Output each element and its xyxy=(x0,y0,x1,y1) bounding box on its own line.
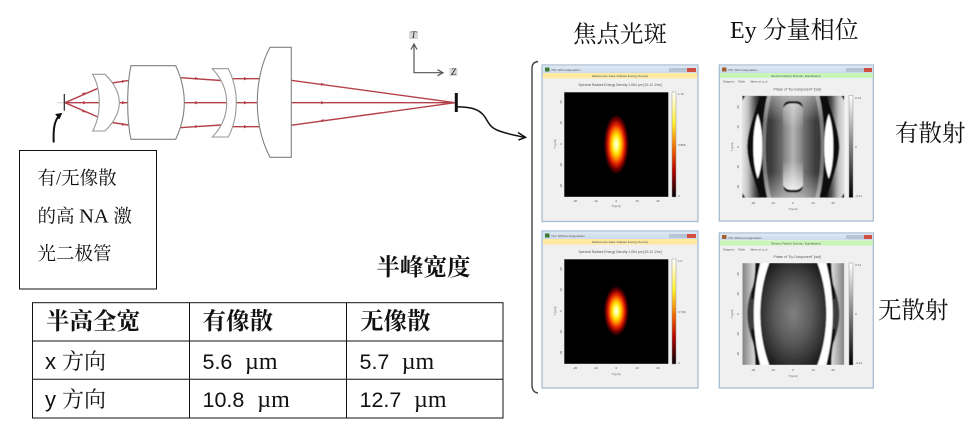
panel: Ey phase with astigmatism xyxy=(719,65,873,221)
panel: Ey phase with astigmatism: 3.14 xyxy=(855,96,861,100)
panel: focal spot with astigmatism: 706: With Astigmatism xyxy=(551,68,581,72)
row label: with scatter: 有散射 xyxy=(895,120,966,147)
optical system diagram xyxy=(54,30,526,157)
table: FWHM values: 方向 xyxy=(62,349,106,374)
panel: focal spot with astigmatism: 20 xyxy=(559,100,563,104)
panel: focal spot with astigmatism: -10 xyxy=(559,163,563,167)
axis label Z xyxy=(450,67,458,77)
panel: focal spot without astigmatism: Y [µm] xyxy=(553,307,557,315)
panel: focal spot without astigmatism: 0 xyxy=(559,310,563,312)
panel: Ey phase with astigmatism: Value at (x,y) xyxy=(750,80,767,84)
table: FWHM values: 无像散 xyxy=(360,308,431,335)
panel: focal spot with astigmatism: 1.72 xyxy=(678,92,684,96)
panel: focal spot with astigmatism: 0 xyxy=(678,194,680,198)
panel: Ey phase without astigmatism: 20 xyxy=(831,368,835,372)
panel: Ey phase with astigmatism: 20 xyxy=(831,201,835,205)
panel: focal spot without astigmatism: -20 xyxy=(573,366,577,370)
panel: Ey phase with astigmatism: 706: With Astigmatism xyxy=(728,68,758,72)
panel: focal spot with astigmatism: Y [µm] xyxy=(553,140,557,148)
panel: focal spot with astigmatism: Radiometric Data: Radiant Energy Density xyxy=(592,74,649,78)
panel: focal spot without astigmatism: 20 xyxy=(656,366,660,370)
panel: Ey phase with astigmatism: -3.14 xyxy=(855,194,862,198)
table: FWHM values xyxy=(32,303,503,418)
panel: Ey phase with astigmatism: Phase of "Ey-Component" [rad] xyxy=(773,88,821,92)
panel: Ey phase with astigmatism: Y [µm] xyxy=(730,143,734,151)
panel: Ey phase with astigmatism: X [µm] xyxy=(789,207,798,211)
callout: laser diode: 的高 NA 激 xyxy=(38,206,132,228)
table: FWHM values: µm xyxy=(257,387,290,413)
panel: Ey phase with astigmatism: Electric Field (k Domain, Equidistant) xyxy=(771,74,821,78)
phase map xyxy=(742,96,844,198)
detector xyxy=(455,93,458,112)
table: FWHM values: µm xyxy=(245,349,278,375)
panel: Ey phase with astigmatism: 20 xyxy=(736,105,740,109)
panel: focal spot without astigmatism: 0 xyxy=(615,366,617,370)
panel: Ey phase with astigmatism: 10 xyxy=(736,125,740,129)
panel: Ey phase with astigmatism: 0 xyxy=(792,201,794,205)
panel: focal spot with astigmatism: -10 xyxy=(594,199,598,203)
callout: laser diode: 光二极管 xyxy=(38,243,112,265)
panel: focal spot with astigmatism: 0 xyxy=(615,199,617,203)
laser source xyxy=(63,94,65,111)
panel: Ey phase without astigmatism: 10 xyxy=(736,292,740,296)
panel: Ey phase without astigmatism: Phase of "Ey-Component" [rad] xyxy=(773,255,821,259)
lens 3 xyxy=(212,69,236,137)
panel: Ey phase without astigmatism: -10 xyxy=(771,368,775,372)
panel: Ey phase without astigmatism: 3.14 xyxy=(855,263,861,267)
source pointer arrow xyxy=(54,114,62,142)
panel: focal spot without astigmatism: 0.799 xyxy=(678,310,686,314)
panel: focal spot without astigmatism xyxy=(542,231,698,388)
panel: Ey phase without astigmatism: Y [µm] xyxy=(730,310,734,318)
detector arrow xyxy=(457,107,526,140)
panel: focal spot without astigmatism: 712: Without Astigmatism xyxy=(551,234,585,238)
table: FWHM values: 5.7 xyxy=(360,350,389,374)
panel: focal spot with astigmatism: -20 xyxy=(559,184,563,188)
table: FWHM values: y xyxy=(45,387,56,412)
panel: Ey phase without astigmatism: Diagram xyxy=(723,248,735,252)
panel: focal spot without astigmatism: Spectral Radiant Energy Density 1.064 µm [10-12 J/m²] xyxy=(578,250,662,254)
colorbar xyxy=(849,96,853,198)
panel: Ey phase with astigmatism: -10 xyxy=(771,201,775,205)
panel: Ey phase with astigmatism: 0 xyxy=(855,145,857,149)
panel: Ey phase with astigmatism: 10 xyxy=(811,201,815,205)
axis label T xyxy=(409,30,418,40)
panel: Ey phase without astigmatism: 0 xyxy=(855,312,857,316)
panel: Ey phase without astigmatism: 0 xyxy=(792,368,794,372)
panel: focal spot without astigmatism: 1.6 xyxy=(678,259,683,263)
panel: focal spot without astigmatism: -10 xyxy=(559,330,563,334)
panel: focal spot without astigmatism: 10 xyxy=(559,288,563,292)
table: FWHM values: 方向 xyxy=(62,387,106,412)
axes xyxy=(411,44,443,76)
axis label T: T xyxy=(411,30,417,40)
panel: Ey phase without astigmatism: 0 xyxy=(736,313,740,315)
panel: focal spot with astigmatism: 0 xyxy=(559,143,563,145)
panel: Ey phase without astigmatism: -10 xyxy=(736,332,740,336)
table: FWHM values: µm xyxy=(414,387,447,413)
panel: Ey phase with astigmatism: -20 xyxy=(736,185,740,189)
panel: focal spot with astigmatism: 10 xyxy=(635,199,639,203)
colorbar xyxy=(849,263,853,365)
lens 4 xyxy=(257,47,291,157)
bracket xyxy=(532,62,538,393)
panel: focal spot with astigmatism: Spectral Radiant Energy Density 1.064 µm [10-12 J/m²] xyxy=(578,83,662,87)
panel: Ey phase with astigmatism: -10 xyxy=(736,165,740,169)
table: FWHM values: 10.8 xyxy=(202,388,244,412)
panel: focal spot without astigmatism: X [µm] xyxy=(612,372,621,376)
panel: focal spot with astigmatism: 0.859 xyxy=(678,143,686,147)
panel: focal spot without astigmatism: 0 xyxy=(678,361,680,365)
table: FWHM values: 5.6 xyxy=(202,350,232,374)
panel: Ey phase without astigmatism: 710: Without Astigmatism xyxy=(728,236,762,240)
callout: laser diode: 有/无像散 xyxy=(38,168,117,190)
callout: laser diode xyxy=(20,150,156,289)
column heading: focal spot: 焦点光斑 xyxy=(573,21,667,48)
lens 1 xyxy=(93,74,119,131)
panel: focal spot without astigmatism: -10 xyxy=(594,366,598,370)
axis label Z: Z xyxy=(451,67,457,77)
table: FWHM values: 半高全宽 xyxy=(46,307,140,335)
panel: Ey phase with astigmatism: Table xyxy=(738,80,746,84)
panel: Ey phase with astigmatism: -20 xyxy=(751,201,755,205)
panel: Ey phase with astigmatism: 0 xyxy=(736,146,740,148)
panel: Ey phase without astigmatism: -20 xyxy=(751,368,755,372)
row label: without scatter: 无散射 xyxy=(878,297,948,324)
panel: focal spot with astigmatism: 10 xyxy=(559,121,563,125)
panel: Ey phase without astigmatism: Electric Field (k Domain, Equidistant) xyxy=(771,242,821,246)
panel: Ey phase with astigmatism: Diagram xyxy=(723,80,735,84)
light rays xyxy=(57,77,455,128)
heading: FWHM: 半峰宽度 xyxy=(376,253,470,281)
panel: Ey phase without astigmatism: X [µm] xyxy=(789,374,798,378)
panel: Ey phase without astigmatism: -20 xyxy=(736,352,740,356)
table: FWHM values: x xyxy=(45,349,56,374)
panel: focal spot with astigmatism: X [µm] xyxy=(612,204,621,208)
table: FWHM values: 12.7 xyxy=(360,388,401,412)
lens 2 xyxy=(128,66,184,139)
column heading: Ey phase: Ey 分量相位 xyxy=(730,17,859,44)
panel: focal spot without astigmatism: 10 xyxy=(635,366,639,370)
panel: focal spot with astigmatism: 20 xyxy=(656,199,660,203)
panel: focal spot without astigmatism: Radiometric Data: Radiant Energy Density xyxy=(592,240,649,244)
panel: Ey phase without astigmatism: 10 xyxy=(811,368,815,372)
panel: Ey phase without astigmatism: Value at (x,y) xyxy=(750,248,767,252)
phase map xyxy=(742,263,844,365)
panel: focal spot with astigmatism: -20 xyxy=(573,199,577,203)
panel: focal spot without astigmatism: -20 xyxy=(559,351,563,355)
table: FWHM values: µm xyxy=(402,349,435,375)
panel: Ey phase without astigmatism: 20 xyxy=(736,272,740,276)
panel: Ey phase without astigmatism xyxy=(719,233,873,388)
table: FWHM values: 有像散 xyxy=(202,308,273,335)
panel: focal spot with astigmatism xyxy=(542,65,698,222)
panel: focal spot without astigmatism: 20 xyxy=(559,267,563,271)
panel: Ey phase without astigmatism: -3.14 xyxy=(855,361,862,365)
panel: Ey phase without astigmatism: Table xyxy=(738,248,746,252)
